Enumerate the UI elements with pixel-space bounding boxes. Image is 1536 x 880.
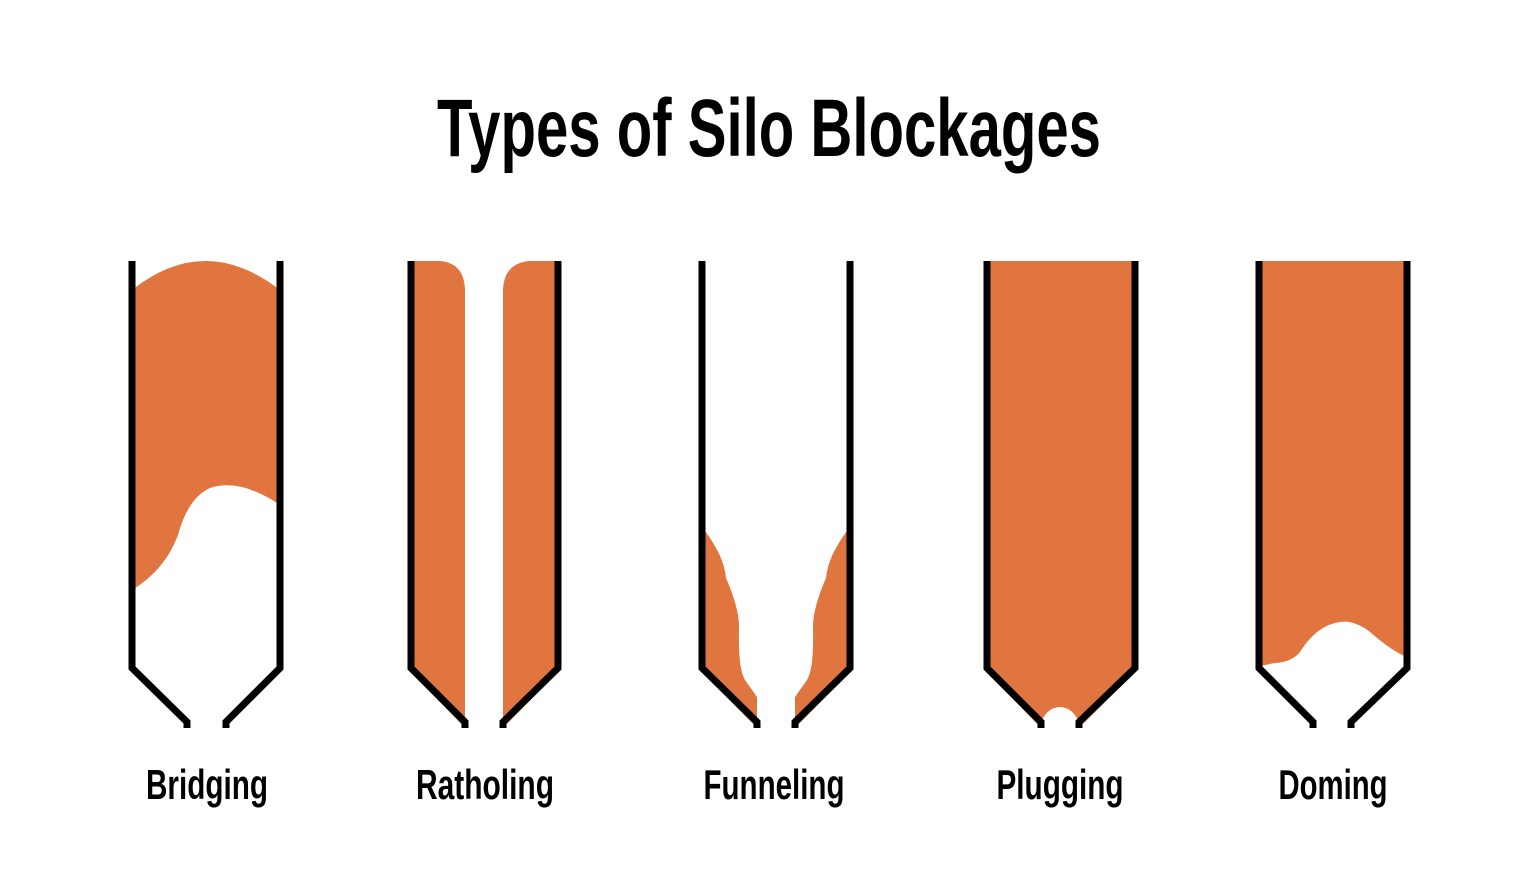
material fill: residue	[702, 527, 757, 728]
material fill: side walls	[411, 261, 465, 728]
silo outline	[987, 261, 1135, 728]
silo outline	[411, 261, 558, 728]
title: Types of Silo Blockages	[437, 83, 1101, 174]
label: Bridging	[146, 761, 268, 808]
silo outline	[702, 261, 850, 728]
label: Plugging	[996, 761, 1124, 808]
silo outline	[1259, 261, 1407, 728]
label: Doming	[1278, 761, 1388, 808]
panel: plugging	[987, 261, 1135, 808]
label: Ratholing	[416, 761, 554, 808]
material fill: full	[987, 261, 1135, 728]
material fill: dome	[1259, 261, 1407, 667]
silo outline	[132, 261, 280, 728]
material fill: bridge	[132, 261, 280, 590]
panel: doming	[1259, 261, 1407, 808]
label: Funneling	[704, 761, 844, 808]
panel: bridging	[132, 261, 280, 808]
panel: ratholing	[411, 261, 558, 808]
panel: funneling	[702, 261, 850, 808]
